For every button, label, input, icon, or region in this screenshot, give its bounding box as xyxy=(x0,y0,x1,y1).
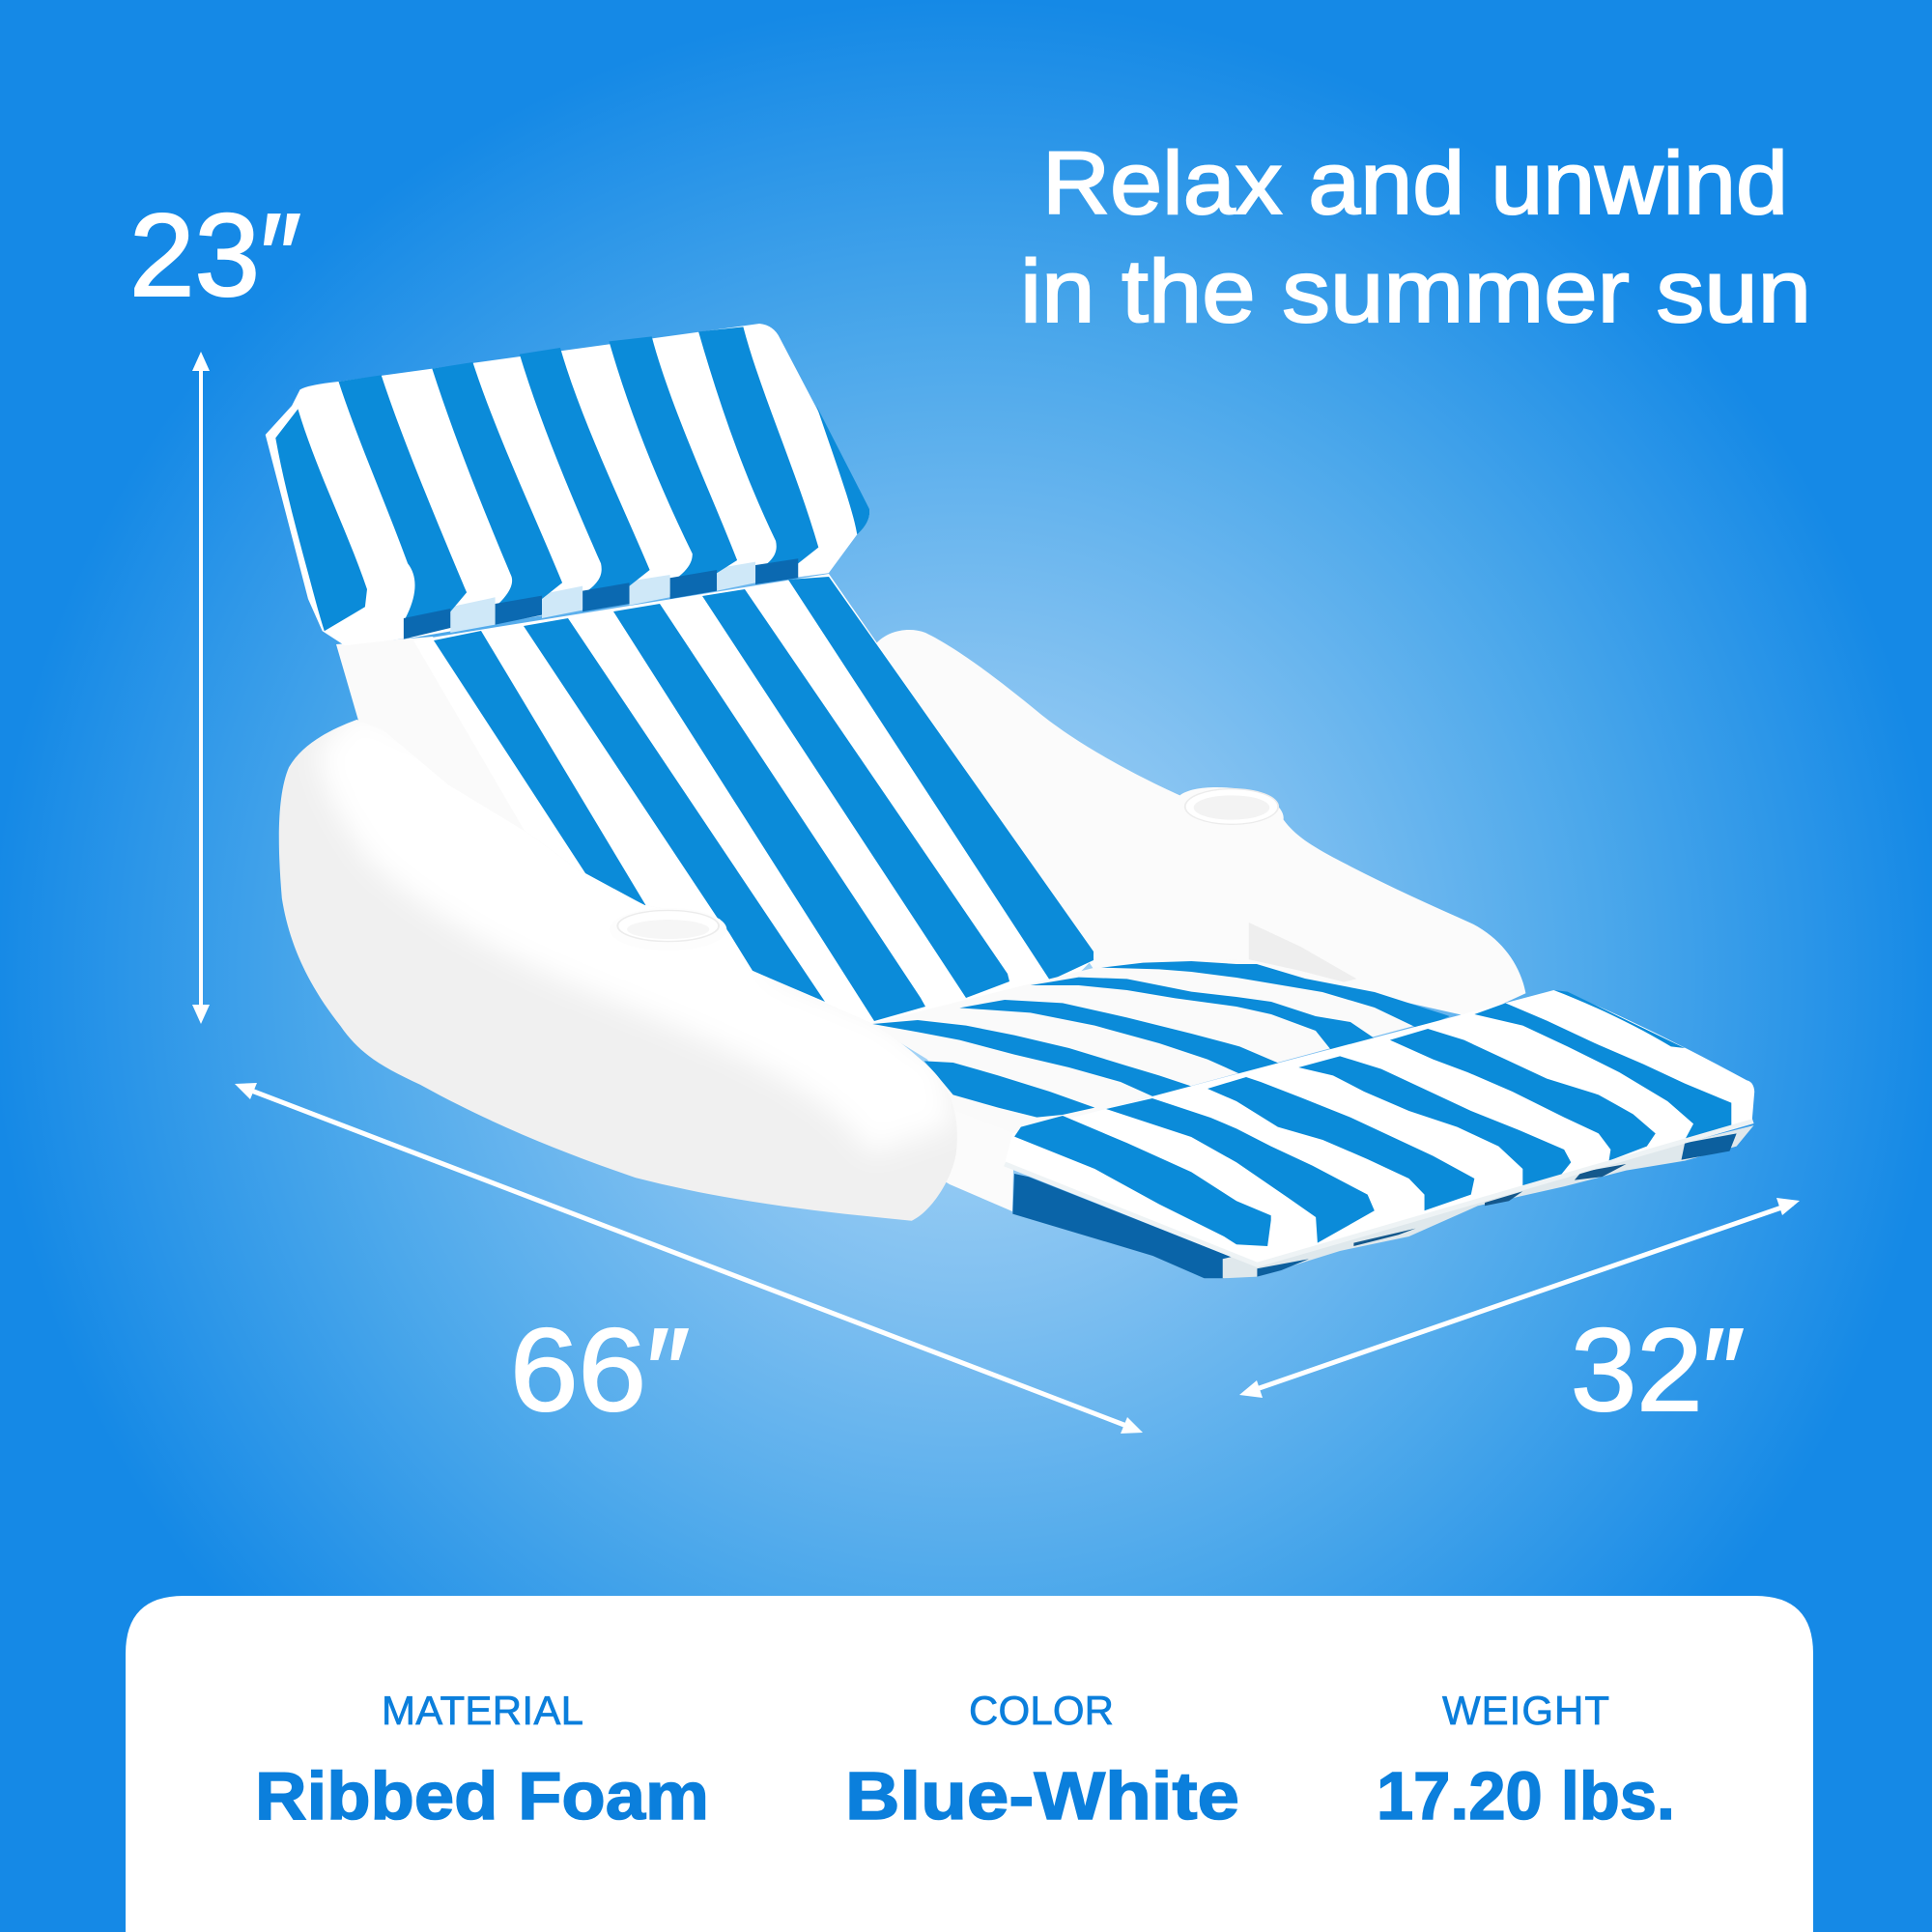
spec: material: Ribbed Foam xyxy=(255,1758,709,1833)
specs panel xyxy=(126,1596,1813,1932)
right armrest xyxy=(876,630,1525,1017)
spec: color xyxy=(845,1688,1239,1833)
footrest underside xyxy=(1012,1174,1236,1278)
spec: material: MATERIAL xyxy=(382,1688,583,1733)
spec: material xyxy=(255,1688,709,1833)
back cushion xyxy=(413,574,1095,1038)
spec: color: COLOR xyxy=(969,1688,1114,1733)
dimension: length 66 inches: 66″ xyxy=(510,1304,690,1435)
dimension: height 23 inches xyxy=(129,189,301,1024)
heading: relax and unwind: in the summer sun xyxy=(1020,242,1811,341)
seat cushion xyxy=(869,959,1450,1133)
spec: weight xyxy=(1377,1688,1675,1833)
spec: weight: 17.20 lbs. xyxy=(1377,1758,1675,1833)
left armrest xyxy=(279,705,957,1221)
heading: relax and unwind xyxy=(1020,134,1811,341)
dimension: width 32 inches: 32″ xyxy=(1571,1304,1745,1435)
rear support frame xyxy=(336,637,585,873)
spec: color: Blue-White xyxy=(845,1758,1239,1833)
heading: relax and unwind: Relax and unwind xyxy=(1042,134,1788,233)
headrest cushion xyxy=(266,324,869,645)
footrest cushion xyxy=(1005,990,1754,1278)
spec: weight: WEIGHT xyxy=(1442,1688,1609,1733)
pool lounger chair xyxy=(266,324,1754,1278)
dimension: width 32 inches xyxy=(1239,1198,1800,1435)
dimension: length 66 inches xyxy=(235,1083,1143,1435)
right cup holder xyxy=(1185,789,1278,824)
white float frame under seat xyxy=(908,1092,1014,1211)
left cup holder xyxy=(610,908,726,951)
dimension: height 23 inches: 23″ xyxy=(129,189,301,321)
